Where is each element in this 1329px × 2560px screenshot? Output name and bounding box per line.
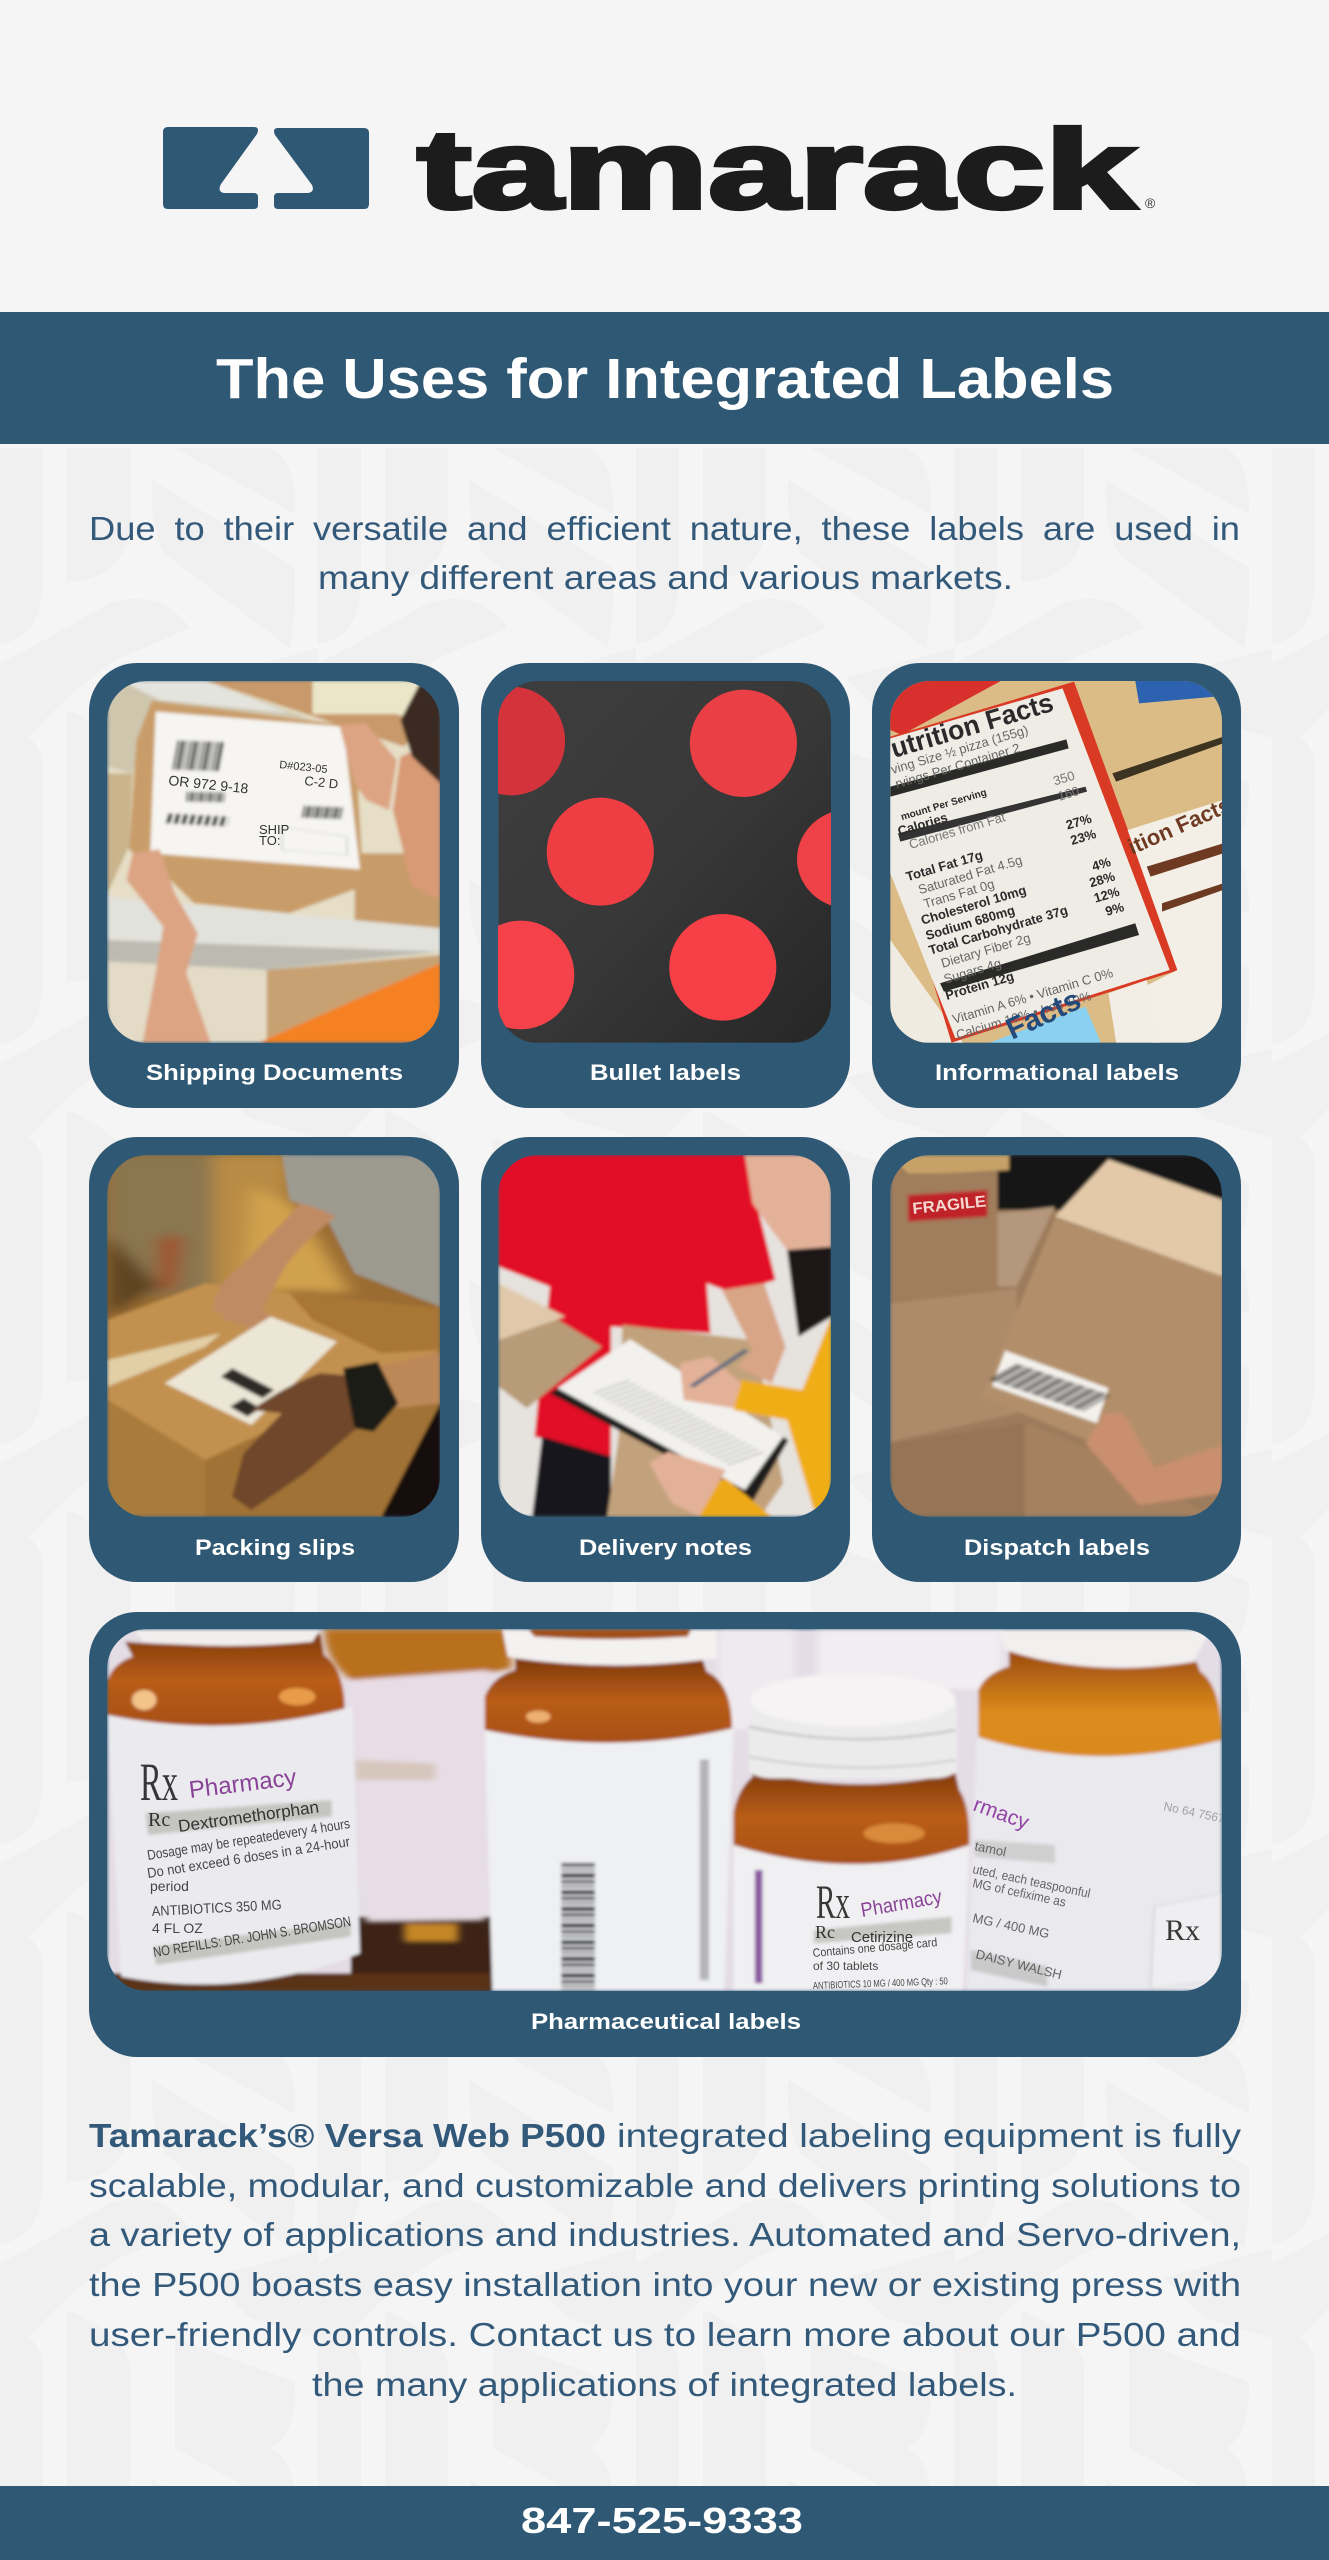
card: shipping documents (89, 663, 459, 1108)
intro text: Due to their versatile and efficient nature, these labels are used in (89, 510, 1240, 547)
fragile sticker text: FRAGILE (912, 1193, 987, 1218)
nutrition facts text: Cholesterol 10mg (919, 882, 1028, 928)
photo: packing slip on box (107, 1155, 440, 1517)
nutrition facts text: 350 (1051, 768, 1076, 788)
bottle label text: uted, each teaspoonful (971, 1861, 1092, 1901)
photo: pharmacy bottles (107, 1629, 1226, 1992)
bottle label text: Do not exceed 6 doses in a 24-hour (146, 1833, 351, 1881)
logo (163, 107, 1156, 232)
nutrition facts text: mount Per Serving (900, 787, 988, 823)
bottle label text: 4 FL OZ (152, 1920, 203, 1936)
card: bullet labels (481, 663, 850, 1108)
background pattern (0, 448, 1329, 2486)
label: Pharmaceutical labels (531, 2009, 801, 2034)
bottle 4 (733, 1770, 969, 1865)
nutrition facts text: 4% (1090, 854, 1113, 874)
bottle label text: Dosage may be repeatedevery 4 hours (146, 1815, 351, 1863)
nutrition facts text: 23% (1069, 826, 1098, 848)
title band: The Uses for Integrated Labels (216, 347, 1114, 411)
bottle label text: of 30 tablets (813, 1959, 878, 1973)
nutrition facts text: Sugars 4g (942, 955, 1003, 987)
body paragraph: integrated labeling equipment is fully (617, 2117, 1242, 2154)
nutrition facts text: 28% (1087, 868, 1117, 890)
label: Packing slips (195, 1535, 355, 1560)
card: informational labels (866, 663, 1241, 1108)
bottle label text: tamol (973, 1838, 1008, 1860)
bottle label text: ANTIBIOTICS 350 MG (151, 1896, 282, 1919)
registered mark: ® (1145, 195, 1156, 211)
title band (0, 312, 1329, 444)
card: delivery notes (481, 1137, 850, 1582)
photo: nutrition facts labels (890, 681, 1222, 1043)
nutrition facts text: Vitamin A 6% • Vitamin C 0% (951, 965, 1115, 1027)
photo: signing delivery note (499, 1155, 831, 1517)
bottle label text: Pharmacy (859, 1886, 944, 1922)
nutrition facts text: rvings Per Container 2 (893, 740, 1022, 791)
box label text (168, 759, 339, 848)
card: packing slips (89, 1137, 459, 1582)
logo mark (163, 127, 369, 209)
bottle label text: Pharmacy (187, 1764, 298, 1804)
bottle label text: MG of cefixime as (971, 1875, 1068, 1910)
nutrition facts text: 27% (1064, 811, 1094, 833)
intro text (89, 510, 1240, 596)
label: Dispatch labels (964, 1535, 1150, 1560)
bottle label text: Rx (140, 1752, 178, 1812)
bottle label text: NO REFILLS: DR. JOHN S. BROMSON (152, 1913, 352, 1960)
label: Bullet labels (590, 1060, 741, 1085)
nutrition facts text: Saturated Fat 4.5g (916, 852, 1024, 897)
nutrition facts text: Sodium 680mg (924, 902, 1017, 943)
second nutrition panel text: ition Facts (1124, 792, 1235, 860)
nutrition facts text: Protein 12g (943, 968, 1016, 1003)
body paragraph: Tamarack’s® Versa Web P500 (89, 2117, 606, 2154)
label: Shipping Documents (146, 1060, 403, 1085)
bottle label text: Cetirizine (851, 1929, 913, 1946)
bottle label text: rmacy (970, 1793, 1032, 1834)
bottle label text: Rc (148, 1809, 170, 1831)
nutrition facts text: Total Fat 17g (904, 847, 984, 884)
body paragraph: scalable, modular, and customizable and delivers printing solutions to (89, 2167, 1241, 2204)
nutrition facts text: Calories (896, 810, 949, 839)
card: pharmaceutical labels (89, 1612, 1241, 2057)
photo: shipping box on shelf (107, 681, 440, 1043)
bottle label text: Contains one dosage card (812, 1935, 938, 1960)
nutrition facts text: 9% (1103, 899, 1126, 919)
nutrition facts text (890, 698, 1124, 1038)
box label text: OR 972 9-18 (168, 772, 249, 796)
nutrition facts text: ving Size ½ pizza (155g) (889, 722, 1030, 777)
bottle label text (140, 1752, 1226, 1992)
footer band with phone number (0, 2486, 1329, 2560)
nutrition facts text: Trans Fat 0g (922, 876, 996, 911)
bottle label text: Rx (1165, 1914, 1200, 1947)
nutrition facts text: 12% (1092, 884, 1122, 906)
body paragraph: the many applications of integrated labels. (312, 2366, 1017, 2403)
bottle 1 (107, 1633, 345, 1726)
photo: red dots on black (498, 681, 831, 1043)
bottle label text: Dextromethorphan (177, 1797, 320, 1836)
box label text: D#023-05 (279, 759, 328, 776)
label: Informational labels (935, 1060, 1179, 1085)
bottle label text: Rx (816, 1876, 850, 1929)
box label text: SHIP (259, 822, 289, 837)
card: dispatch labels (872, 1137, 1241, 1582)
label: Delivery notes (579, 1535, 752, 1560)
body paragraph (89, 2117, 1242, 2403)
body paragraph: the P500 boasts easy installation into your new or existing press with (89, 2266, 1241, 2303)
box label text: C-2 D (304, 773, 339, 792)
nutrition facts text: utrition Facts (887, 687, 1057, 764)
nutrition facts text: Calories from Fat (907, 809, 1007, 852)
box label text: TO: (259, 833, 280, 848)
bottle label text: period (150, 1878, 189, 1894)
bottle 5 (978, 1650, 1222, 1756)
bottle label text: DAISY WALSH (974, 1946, 1063, 1982)
nutrition facts text: 160 (1056, 783, 1081, 804)
body paragraph: a variety of applications and industries. Automated and Servo-driven, (89, 2216, 1241, 2253)
photo: barcode box in warehouse (890, 1155, 1223, 1517)
nutrition facts text: Dietary Fiber 2g (939, 930, 1032, 971)
nutrition facts text: Calcium 10% • Iron 10% (954, 988, 1093, 1042)
blue panel text: Facts (1001, 983, 1086, 1046)
wordmark: tamarack (417, 107, 1137, 232)
bottle label text: No 64 7567 (1162, 1799, 1226, 1826)
nutrition facts text: Total Carbohydrate 37g (927, 902, 1070, 958)
bottle label text: MG / 400 MG (971, 1910, 1051, 1941)
intro text: many different areas and various markets. (318, 559, 1013, 596)
bottle 3 (485, 1658, 732, 1743)
body paragraph: user-friendly controls. Contact us to learn more about our P500 and (89, 2316, 1241, 2353)
footer band with phone number: 847-525-9333 (521, 2500, 803, 2541)
bottle label text: Rc (815, 1922, 835, 1942)
bottle label text: ANTIBIOTICS 10 MG / 400 MG Qty : 50 (813, 1976, 948, 1992)
